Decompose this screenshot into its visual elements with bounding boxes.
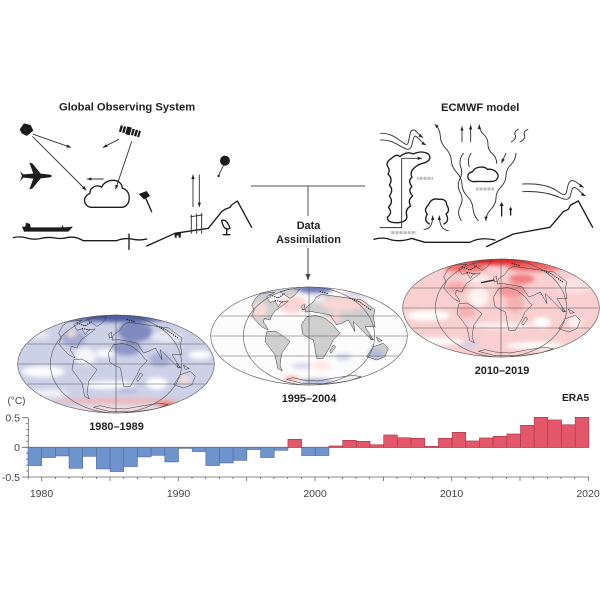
label: Data Assimilation: Data	[297, 220, 321, 232]
label: 1995-2004: 1995–2004	[282, 393, 336, 405]
sea surface	[13, 237, 147, 241]
arrow: reflected short	[502, 153, 506, 163]
y axis labels: 0.5	[5, 412, 20, 424]
icon: cloud	[85, 180, 129, 207]
hatch: rain under anvil	[417, 174, 433, 183]
arrows: upward from cloud top	[462, 125, 471, 142]
anomaly shading: cool	[22, 310, 212, 412]
icon: satellite dish	[222, 220, 230, 235]
squiggle: short under cloud top	[468, 153, 471, 167]
arrow: upward radiation	[192, 175, 194, 207]
arrow: satellite to cloud	[33, 137, 86, 190]
icon: weather station	[175, 232, 181, 238]
arrow: longwave outgoing left	[435, 124, 478, 221]
artefact stroke in the North Atlantic	[481, 280, 494, 283]
label: ERA5: ERA5	[562, 393, 590, 404]
arrow: into maps	[307, 248, 309, 280]
arrow: cloud leftward	[87, 178, 103, 180]
map: 2010-2019 temperature anomaly	[403, 254, 599, 357]
arctic islands	[270, 291, 371, 310]
land profile with mountain	[487, 201, 593, 247]
icon: buoy	[127, 234, 131, 249]
arrow: satellite to atmosphere	[33, 134, 71, 147]
y axis labels: -0.5	[2, 472, 20, 484]
arrows: mountain winds	[523, 180, 585, 199]
heading: Global Observing System: Global Observing System	[59, 102, 195, 114]
coastlines	[444, 261, 580, 356]
unit label: (°C)	[8, 395, 26, 407]
y axis labels	[2, 412, 20, 484]
icon: geostationary satellite	[20, 123, 33, 136]
arrow: longwave outgoing right	[479, 125, 497, 163]
arrow: solar to surface	[486, 153, 516, 221]
y axis	[22, 418, 589, 477]
x axis labels: 1990	[167, 488, 190, 500]
label: Data Assimilation	[276, 220, 341, 246]
arrow: convective updraft	[380, 158, 422, 228]
arrows: surface fluxes	[500, 202, 512, 216]
icon: stratus cloud	[468, 167, 498, 182]
arctic islands	[77, 319, 178, 338]
x axis labels: 2010	[440, 488, 463, 500]
arrows: upper winds	[381, 130, 426, 149]
graticule	[211, 287, 407, 385]
land profile with mountain	[147, 201, 252, 246]
graticule	[18, 315, 214, 413]
icon: aeroplane	[20, 163, 52, 189]
bar chart: ERA5 global temperature anomaly	[2, 393, 600, 500]
x axis labels: 2000	[303, 488, 327, 500]
arrow: polar satellite to atmosphere	[103, 139, 119, 147]
panel: data assimilation connector	[251, 186, 365, 280]
connector stem	[307, 186, 309, 216]
icon: towers	[191, 213, 202, 233]
map: 1995-2004 temperature anomaly	[211, 284, 407, 385]
panel: observing system icons	[13, 123, 252, 249]
panel: ECMWF model icons	[374, 124, 593, 247]
graticule	[403, 259, 599, 357]
icon: polar satellite	[119, 125, 141, 138]
heading: ECMWF model: ECMWF model	[441, 102, 519, 114]
icon: weather balloon	[217, 156, 230, 177]
x axis labels: 1980	[30, 488, 53, 500]
land fill	[252, 289, 388, 371]
label: Data Assimilation: Assimilation	[276, 234, 341, 246]
anomaly shading: warm	[406, 254, 594, 349]
icon: ship	[22, 223, 73, 232]
sea surface	[374, 238, 495, 242]
icon: small cumulus	[426, 199, 448, 224]
squiggle: long surface emission	[458, 153, 463, 221]
coastlines	[59, 317, 195, 412]
anomaly shading: neutral	[251, 284, 384, 384]
hatch: rain under stratus	[476, 184, 494, 193]
x axis labels: 2020	[576, 488, 600, 500]
map: 1980-1989 temperature anomaly	[18, 310, 214, 413]
icon: radar on aircraft	[139, 191, 152, 212]
arrow: downward radiation	[198, 175, 201, 207]
squiggles: incoming solar	[511, 129, 528, 142]
connector bar	[251, 185, 365, 187]
label: 2010-2019: 2010–2019	[475, 365, 529, 377]
bars	[28, 417, 589, 472]
hatch: rain at surface	[391, 228, 416, 237]
arctic islands	[462, 263, 563, 282]
y axis labels: 0	[14, 442, 20, 454]
coastlines	[252, 289, 388, 384]
x axis	[28, 477, 589, 481]
arrow: polar satellite to cloud	[116, 142, 132, 189]
icon: large convective cloud	[387, 152, 430, 223]
arrows: cumulus updrafts	[424, 216, 448, 231]
label: 1980-1989: 1980–1989	[89, 421, 144, 433]
x axis labels	[30, 488, 600, 500]
